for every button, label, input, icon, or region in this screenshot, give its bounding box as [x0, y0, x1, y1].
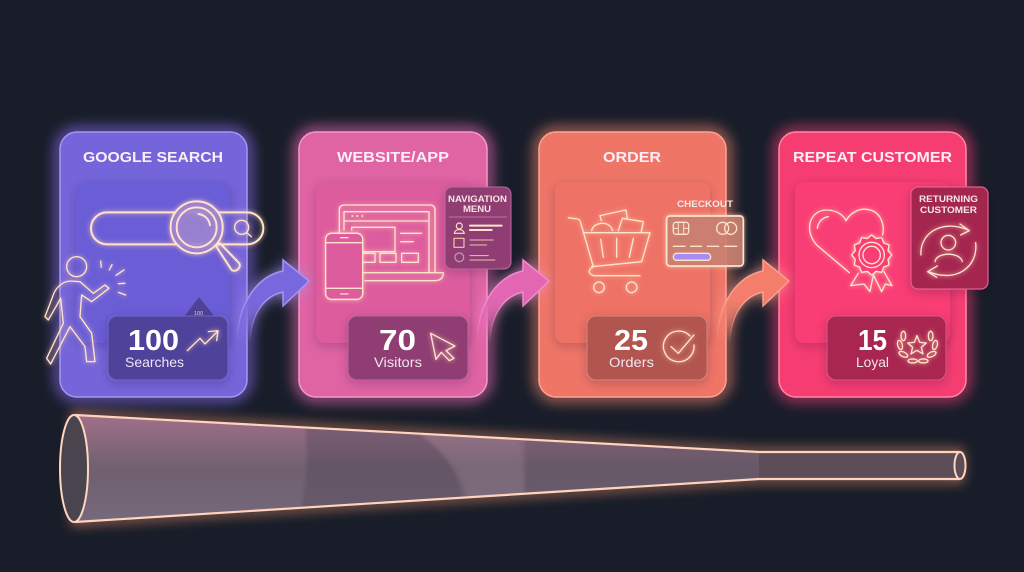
callout: navigation menu — [445, 187, 511, 269]
tag: 100: 100 — [194, 311, 203, 317]
funnel — [60, 415, 966, 522]
heading: website/app: WEBSITE/APP — [337, 149, 449, 166]
tag: 100 — [184, 297, 215, 317]
stat: 25 orders — [587, 316, 707, 380]
icon: trend arrow — [187, 331, 218, 351]
icon: shopping cart — [568, 210, 650, 293]
arrow: order to repeat customer — [717, 260, 789, 342]
inner panel — [316, 182, 470, 343]
icon: walking person — [45, 257, 126, 364]
icon: returning person — [921, 224, 976, 277]
panel: order — [539, 132, 743, 397]
heading: repeat customer: REPEAT CUSTOMER — [793, 149, 952, 166]
heading: google search: GOOGLE SEARCH — [83, 149, 223, 166]
stat: 100 searches: 100 — [128, 325, 179, 357]
inner panel — [76, 182, 230, 343]
stat: 15 loyal: 15 — [858, 325, 887, 357]
icon: credit card — [667, 216, 743, 266]
label: checkout: CHECKOUT — [677, 199, 733, 210]
stat: 70 visitors: Visitors — [374, 354, 422, 370]
callout: navigation menu: NAVIGATION — [448, 194, 507, 205]
callout: returning customer — [911, 187, 988, 289]
stat: 100 searches: Searches — [125, 354, 184, 370]
stat: 15 loyal: Loyal — [856, 354, 889, 370]
stat: 25 orders: Orders — [609, 354, 654, 370]
icon: check circle — [663, 331, 694, 362]
panel: website/app — [299, 132, 511, 397]
stat: 25 orders: 25 — [614, 325, 648, 357]
arrow: search to website — [237, 260, 309, 342]
icon: laurel star — [897, 331, 938, 363]
stat: 15 loyal — [827, 316, 946, 380]
icon: heart with rosette — [810, 209, 892, 292]
icon: laptop and phone — [326, 205, 443, 299]
infographic canvas — [42, 117, 989, 534]
stat: 100 searches — [108, 316, 228, 380]
stat: 70 visitors: 70 — [379, 325, 416, 357]
inner panel — [555, 182, 710, 343]
icon: search bar with magnifier — [91, 201, 263, 271]
stat: 70 visitors — [348, 316, 468, 380]
arrow: website to order — [477, 260, 549, 342]
callout: returning customer: CUSTOMER — [920, 205, 977, 216]
panel: google search — [45, 132, 263, 397]
icon: cursor — [431, 333, 455, 361]
callout: returning customer: RETURNING — [919, 194, 978, 205]
inner panel — [795, 182, 950, 343]
icon: menu items — [454, 223, 502, 262]
callout: navigation menu: MENU — [463, 204, 491, 215]
heading: order: ORDER — [603, 149, 661, 166]
panel: repeat customer — [779, 132, 988, 397]
